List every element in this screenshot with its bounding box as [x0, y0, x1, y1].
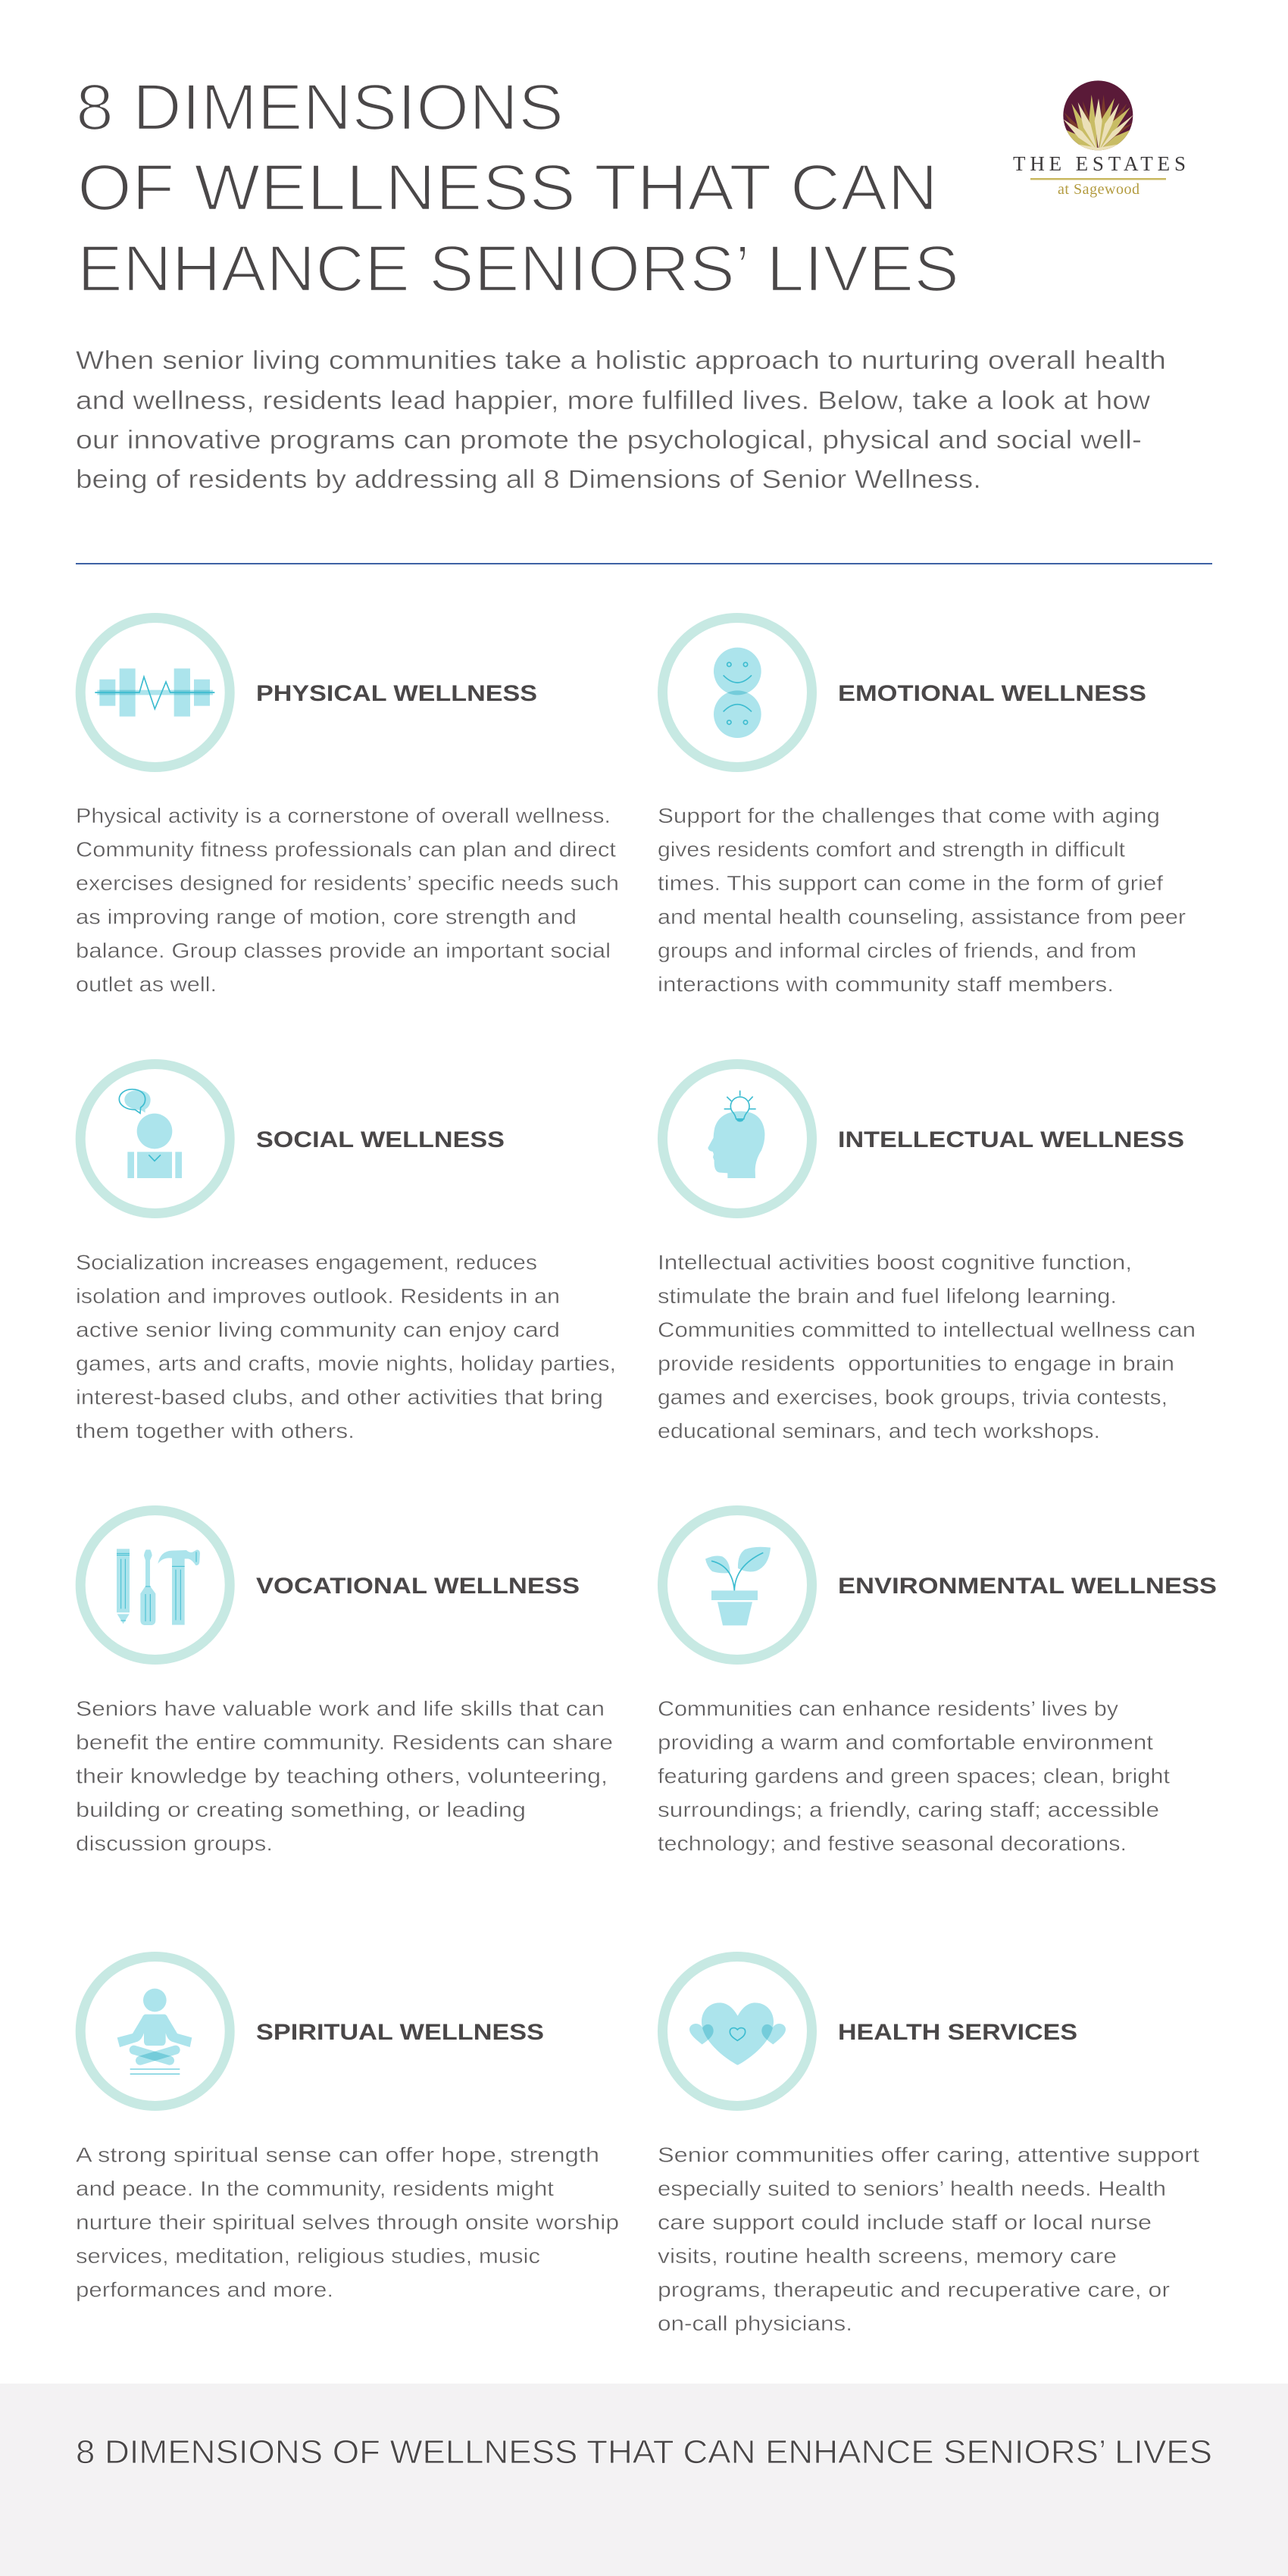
icon: happy and sad faces — [662, 618, 812, 767]
icon: potted plant — [662, 1511, 812, 1659]
logo: The Estates at Sagewood: THE ESTATES — [1013, 152, 1186, 175]
intro paragraph: being of residents by addressing all 8 Dimensions of Senior Wellness. — [76, 465, 981, 494]
icon: pencil, screwdriver and hammer — [80, 1511, 230, 1659]
text block: Communities committed to intellectual wellness can — [658, 1318, 1196, 1341]
text block: featuring gardens and green spaces; clean, bright — [658, 1764, 1170, 1788]
text block: discussion groups. — [76, 1832, 273, 1855]
title: 8 DIMENSIONS — [76, 71, 564, 144]
text block: Communities can enhance residents’ lives by — [658, 1697, 1118, 1720]
text block: building or creating something, or leading — [76, 1798, 526, 1821]
icon: person with speech bubble — [80, 1064, 230, 1214]
heading: EMOTIONAL WELLNESS — [838, 681, 1146, 706]
icon: meditating figure — [80, 1956, 230, 2106]
text block: Physical activity is a cornerstone of overall wellness. — [76, 804, 611, 827]
logo: The Estates at Sagewood — [1013, 80, 1186, 198]
intro paragraph: and wellness, residents lead happier, more fulfilled lives. Below, take a look at how — [76, 386, 1151, 415]
footer band: 8 DIMENSIONS OF WELLNESS THAT CAN ENHANCE SENIORS’ LIVES — [76, 2434, 1212, 2471]
text block: Intellectual activities boost cognitive function, — [658, 1250, 1132, 1274]
heading: SPIRITUAL WELLNESS — [256, 2020, 544, 2045]
text block: their knowledge by teaching others, volunteering, — [76, 1764, 608, 1788]
intro paragraph — [76, 346, 1166, 494]
text block: Seniors have valuable work and life skills that can — [76, 1697, 605, 1720]
text block: A strong spiritual sense can offer hope, strength — [76, 2143, 599, 2167]
logo: The Estates at Sagewood: at Sagewood — [1058, 181, 1140, 198]
text block: groups and informal circles of friends, and from — [658, 939, 1136, 962]
text block — [76, 1250, 616, 1443]
text block — [76, 804, 619, 996]
text block: them together with others. — [76, 1419, 355, 1443]
text block: and mental health counseling, assistance from peer — [658, 905, 1186, 929]
icon: head with light bulb — [662, 1064, 812, 1214]
text block: providing a warm and comfortable environment — [658, 1730, 1153, 1754]
heading: VOCATIONAL WELLNESS — [256, 1574, 580, 1599]
text block — [658, 1697, 1170, 1855]
text block: on-call physicians. — [658, 2312, 852, 2335]
text block: care support could include staff or local nurse — [658, 2211, 1152, 2234]
text block: visits, routine health screens, memory care — [658, 2244, 1117, 2268]
text block: educational seminars, and tech workshops. — [658, 1419, 1100, 1443]
text block: interactions with community staff members. — [658, 973, 1114, 996]
heading: INTELLECTUAL WELLNESS — [838, 1127, 1184, 1152]
text block: isolation and improves outlook. Residents in an — [76, 1284, 560, 1308]
text block: nurture their spiritual selves through onsite worship — [76, 2211, 619, 2234]
text block: programs, therapeutic and recuperative care, or — [658, 2277, 1170, 2302]
text block: especially suited to seniors’ health needs. Health — [658, 2177, 1166, 2200]
text block: interest-based clubs, and other activities that bring — [76, 1385, 603, 1409]
panel: health services — [658, 1956, 1199, 2335]
text block: games and exercises, book groups, trivia contests, — [658, 1385, 1168, 1409]
text block: provide residents opportunities to engage in brain — [658, 1352, 1174, 1375]
panel: social wellness — [76, 1064, 616, 1443]
text block: Senior communities offer caring, attentive support — [658, 2143, 1199, 2167]
text block: outlet as well. — [76, 973, 217, 996]
text block: active senior living community can enjoy card — [76, 1318, 560, 1341]
text block: balance. Group classes provide an important social — [76, 939, 611, 962]
footer band — [0, 2384, 1288, 2576]
heading: ENVIRONMENTAL WELLNESS — [838, 1574, 1217, 1599]
text block: Support for the challenges that come with aging — [658, 804, 1160, 827]
text block — [658, 2143, 1199, 2335]
text block: games, arts and crafts, movie nights, holiday parties, — [76, 1352, 616, 1375]
intro paragraph: our innovative programs can promote the psychological, physical and social well- — [76, 426, 1142, 455]
icon: hearts — [662, 1956, 812, 2106]
panel: intellectual wellness — [658, 1064, 1196, 1443]
panel: environmental wellness — [658, 1511, 1217, 1855]
heading: HEALTH SERVICES — [838, 2020, 1077, 2045]
text block — [658, 804, 1186, 996]
text block: exercises designed for residents’ specific needs such — [76, 871, 619, 895]
text block: times. This support can come in the form of grief — [658, 871, 1163, 895]
text block — [76, 2143, 619, 2302]
text block: Socialization increases engagement, reduces — [76, 1250, 537, 1274]
text block — [76, 1697, 613, 1855]
text block: gives residents comfort and strength in difficult — [658, 838, 1125, 861]
text block: services, meditation, religious studies, music — [76, 2244, 540, 2268]
text block: as improving range of motion, core strength and — [76, 905, 577, 929]
text block: Community fitness professionals can plan and direct — [76, 838, 616, 861]
panel: emotional wellness — [658, 618, 1186, 996]
heading: PHYSICAL WELLNESS — [256, 681, 537, 706]
text block: stimulate the brain and fuel lifelong learning. — [658, 1284, 1117, 1308]
text block: performances and more. — [76, 2277, 333, 2302]
icon: barbell with heartbeat — [80, 618, 230, 767]
text block: and peace. In the community, residents might — [76, 2177, 554, 2200]
panel: physical wellness — [76, 618, 619, 996]
heading: SOCIAL WELLNESS — [256, 1127, 505, 1152]
panel: spiritual wellness — [76, 1956, 619, 2302]
intro paragraph: When senior living communities take a holistic approach to nurturing overall health — [76, 346, 1166, 375]
text block: benefit the entire community. Residents can share — [76, 1730, 613, 1754]
text block: surroundings; a friendly, caring staff; accessible — [658, 1798, 1159, 1821]
text block: technology; and festive seasonal decorations. — [658, 1832, 1127, 1855]
title — [76, 71, 959, 305]
title: OF WELLNESS THAT CAN — [77, 152, 938, 224]
title: ENHANCE SENIORS’ LIVES — [77, 233, 959, 305]
panel: vocational wellness — [76, 1511, 613, 1855]
text block — [658, 1250, 1196, 1443]
